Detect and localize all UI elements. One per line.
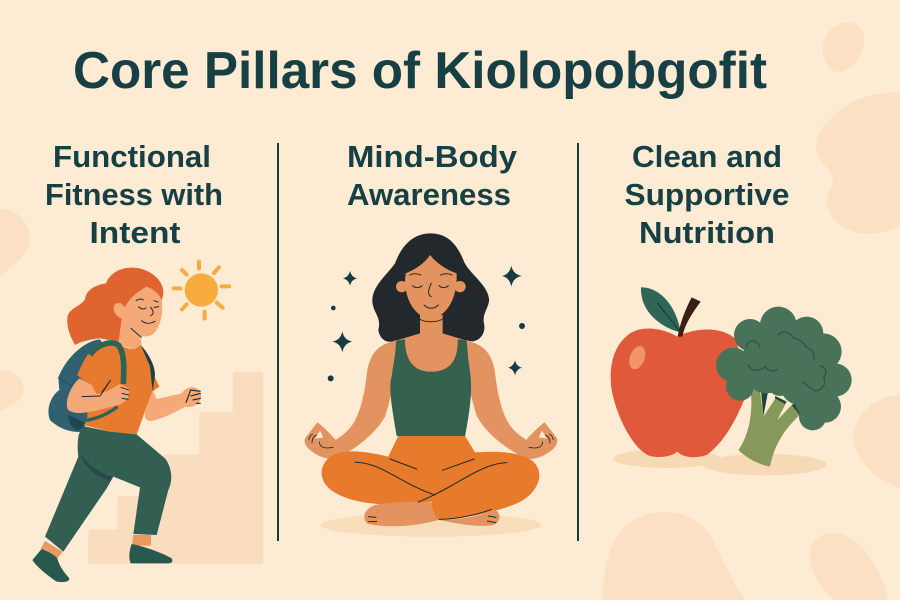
- feet: [364, 502, 438, 526]
- hair: [372, 233, 489, 342]
- backpack: [48, 339, 107, 432]
- illustration: apple and broccoli: [611, 287, 852, 475]
- hair: [67, 268, 163, 345]
- trousers: [45, 426, 171, 552]
- face lines: [131, 299, 159, 337]
- heading: functional fitness: Functional: [53, 139, 211, 174]
- divider right: [577, 143, 579, 541]
- broccoli: [716, 307, 852, 467]
- heading: functional fitness: Intent: [90, 215, 180, 250]
- right arm: [465, 340, 557, 459]
- ankles: [132, 535, 151, 546]
- heading: nutrition: [624, 139, 790, 250]
- title: Core Pillars of Kiolopobgofit: [73, 42, 767, 100]
- divider left: [277, 143, 279, 541]
- illustration: woman climbing stairs: [32, 262, 263, 582]
- heading: mind-body: Awareness: [347, 177, 511, 212]
- illustration: meditating woman: [305, 233, 557, 537]
- left arm: [67, 378, 129, 413]
- right arm: [145, 387, 201, 421]
- heading: mind-body: Mind-Body: [347, 139, 518, 174]
- backpack strap: [90, 343, 124, 384]
- floor shadow: [320, 513, 542, 537]
- crossed legs: [322, 436, 539, 520]
- tank top: [390, 339, 471, 437]
- stairs: [88, 372, 263, 564]
- sparkles: [328, 266, 525, 381]
- heading: nutrition: Nutrition: [639, 215, 775, 250]
- heading: functional fitness: Fitness with: [45, 177, 223, 212]
- heading: mind-body: [347, 139, 518, 212]
- leg lines: [355, 459, 507, 523]
- apple: [611, 287, 747, 457]
- neck and head: [114, 287, 162, 348]
- heading: nutrition: Clean and: [632, 139, 782, 174]
- left arm: [305, 340, 397, 459]
- sun: [174, 262, 229, 319]
- heading: nutrition: Supportive: [624, 177, 790, 212]
- ground shadows: [613, 449, 827, 475]
- heading: functional fitness: [45, 139, 223, 250]
- fist lines: [186, 390, 201, 403]
- shoes: [129, 544, 172, 563]
- shirt: [77, 343, 159, 434]
- face: [396, 255, 466, 322]
- neck and chest: [396, 315, 467, 377]
